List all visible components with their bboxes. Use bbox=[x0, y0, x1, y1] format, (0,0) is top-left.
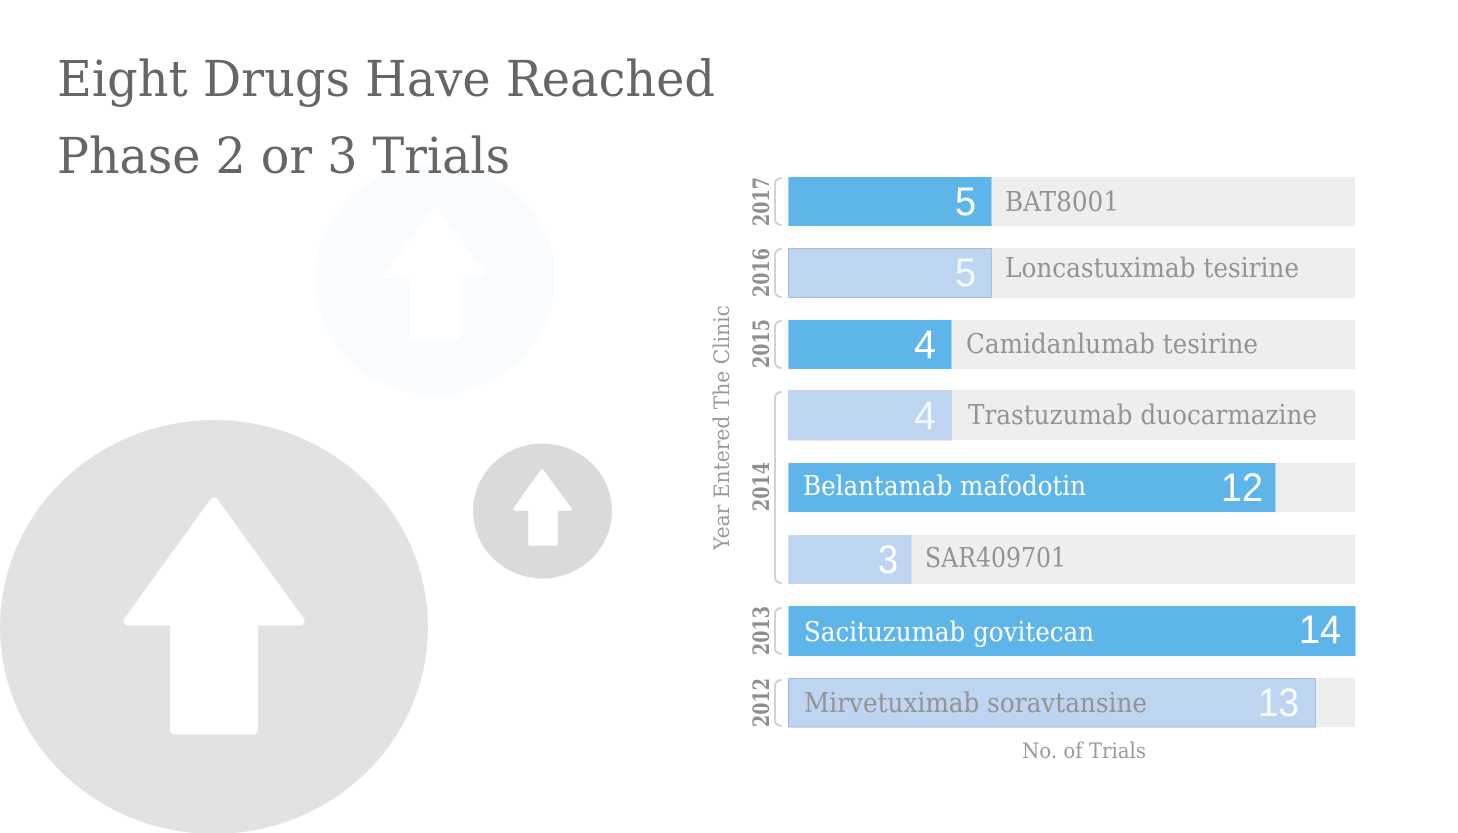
row: 2012 Mirvetuximab soravtansine: 2012 bbox=[749, 678, 775, 727]
row: 2014 Trastuzumab duocarmazine bbox=[788, 390, 1355, 440]
row: 2014 Belantamab mafodotin bbox=[788, 463, 1355, 512]
icon: small grey circle with up arrow bbox=[473, 444, 612, 578]
bar chart bbox=[749, 177, 1356, 727]
row: 2013 Sacituzumab govitecan bbox=[749, 606, 1356, 656]
row: 2015 Camidanlumab tesirine: 4 bbox=[914, 323, 936, 367]
row: 2015 Camidanlumab tesirine: 2015 bbox=[749, 319, 775, 368]
row: 2013 Sacituzumab govitecan: 14 bbox=[1299, 608, 1341, 652]
title: Eight Drugs Have Reached bbox=[57, 50, 715, 108]
row: 2017 BAT8001: 5 bbox=[955, 180, 976, 224]
row: 2016 Loncastuximab tesirine: Loncastuximab tesirine bbox=[1005, 253, 1299, 284]
row: 2017 BAT8001: 2017 bbox=[749, 177, 775, 226]
row: 2012 Mirvetuximab soravtansine: Mirvetuximab soravtansine bbox=[804, 688, 1147, 719]
row: 2013 Sacituzumab govitecan: Sacituzumab govitecan bbox=[804, 617, 1094, 648]
bracket and label: 2014: 2014 bbox=[749, 462, 775, 511]
row: 2014 SAR409701: SAR409701 bbox=[925, 543, 1066, 574]
title bbox=[57, 50, 715, 185]
row: 2016 Loncastuximab tesirine bbox=[749, 248, 1355, 298]
row: 2014 Belantamab mafodotin: 12 bbox=[1221, 466, 1263, 510]
bracket and label: 2014 bbox=[749, 392, 782, 583]
row: 2017 BAT8001 bbox=[749, 177, 1355, 226]
row: 2013 Sacituzumab govitecan: 2013 bbox=[749, 606, 775, 655]
row: 2014 Trastuzumab duocarmazine: Trastuzumab duocarmazine bbox=[968, 400, 1317, 431]
icon: pale blue circle with up arrow bbox=[315, 163, 555, 395]
row: 2015 Camidanlumab tesirine: Camidanlumab tesirine bbox=[966, 329, 1258, 360]
row: 2012 Mirvetuximab soravtansine bbox=[749, 678, 1355, 727]
row: 2014 SAR409701: 3 bbox=[878, 538, 898, 582]
y axis title: Year Entered The Clinic bbox=[710, 305, 734, 551]
icon: large grey circle with up arrow bbox=[0, 420, 428, 833]
row: 2014 Belantamab mafodotin: Belantamab mafodotin bbox=[803, 471, 1086, 502]
title: Phase 2 or 3 Trials bbox=[57, 127, 510, 185]
row: 2016 Loncastuximab tesirine: 5 bbox=[955, 251, 976, 295]
row: 2017 BAT8001: BAT8001 bbox=[1005, 187, 1119, 218]
row: 2015 Camidanlumab tesirine bbox=[749, 319, 1355, 369]
row: 2014 SAR409701 bbox=[788, 535, 1355, 584]
row: 2014 Trastuzumab duocarmazine: 4 bbox=[914, 394, 936, 438]
row: 2016 Loncastuximab tesirine: 2016 bbox=[749, 248, 775, 297]
x axis title: No. of Trials bbox=[1022, 739, 1146, 763]
row: 2012 Mirvetuximab soravtansine: 13 bbox=[1258, 681, 1299, 725]
